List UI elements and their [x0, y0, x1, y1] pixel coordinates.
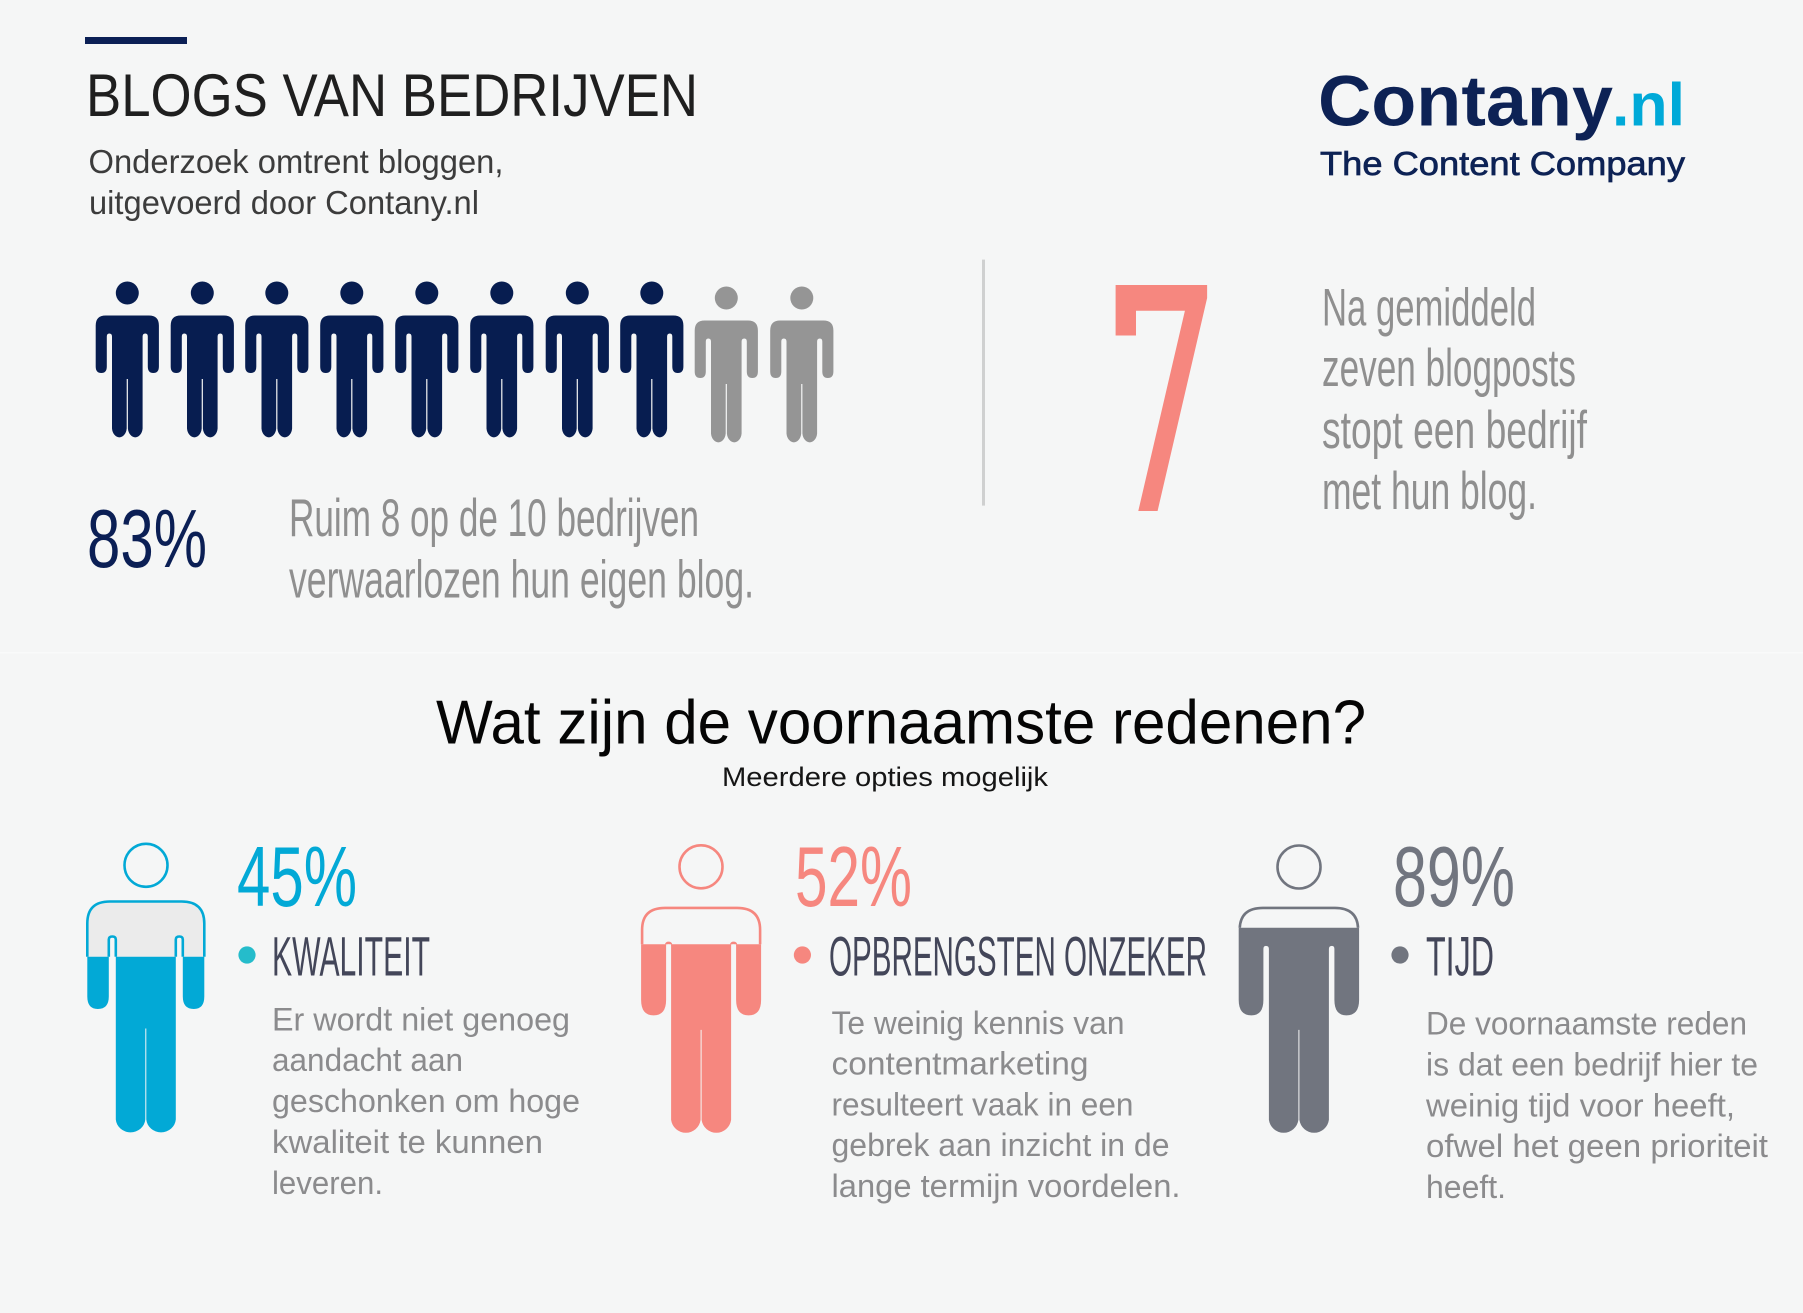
description: Er wordt niet genoeg	[272, 1002, 570, 1038]
description: De voornaamste reden	[1426, 1006, 1747, 1042]
stat description: seven posts	[1322, 278, 1587, 521]
person 8	[620, 282, 683, 437]
description: geschonken om hoge	[272, 1083, 580, 1119]
stat description: verwaarlozen hun eigen blog.	[289, 551, 754, 610]
description: weinig tijd voor heeft,	[1425, 1088, 1735, 1124]
icon: person 52% filled	[641, 845, 761, 1133]
description	[832, 1005, 1180, 1204]
percentage: 89%	[1393, 830, 1515, 925]
stat description: seven posts: met hun blog.	[1322, 462, 1537, 521]
bullet	[794, 946, 811, 964]
subtitle	[88, 143, 504, 221]
bullet	[238, 946, 256, 964]
person 4	[320, 282, 383, 437]
title: BLOGS VAN BEDRIJVEN	[86, 62, 698, 129]
divider	[982, 260, 985, 506]
description	[272, 1002, 580, 1201]
stat description: seven posts: Na gemiddeld	[1322, 278, 1536, 337]
stat description: Ruim 8 op de 10 bedrijven	[289, 489, 699, 548]
panel: opbrengsten onzeker	[641, 830, 1207, 1204]
stat description: seven posts: zeven blogposts	[1322, 339, 1576, 398]
description: resulteert vaak in een	[832, 1086, 1134, 1122]
label: OPBRENGSTEN ONZEKER	[829, 925, 1207, 988]
logo	[1318, 62, 1686, 182]
section heading: Wat zijn de voornaamste redenen?	[436, 688, 1366, 757]
pictogram row: 8 of 10 people	[96, 282, 833, 442]
person 7	[546, 282, 609, 437]
person 6	[470, 282, 533, 437]
label: KWALITEIT	[272, 925, 430, 988]
person 1	[96, 282, 159, 437]
description: gebrek aan inzicht in de	[832, 1127, 1170, 1163]
big number 7: 7	[1104, 224, 1223, 585]
icon: person 45% filled	[87, 844, 204, 1132]
section subheading: Meerdere opties mogelijk	[722, 762, 1049, 792]
percentage: 45%	[237, 830, 357, 925]
logo: .nl	[1612, 72, 1685, 138]
icon: person 89% filled	[1239, 846, 1359, 1133]
stat: 83%: 83%	[87, 492, 207, 585]
description: heeft.	[1426, 1169, 1506, 1205]
panel: tijd	[1239, 830, 1768, 1205]
logo: The Content Company	[1320, 145, 1686, 182]
description: ofwel het geen prioriteit	[1426, 1128, 1768, 1164]
label: TIJD	[1426, 925, 1494, 988]
description: lange termijn voordelen.	[832, 1168, 1180, 1204]
description	[1425, 1006, 1768, 1205]
description: kwaliteit te kunnen	[272, 1124, 543, 1160]
logo: Contany	[1318, 62, 1614, 142]
subtitle: uitgevoerd door Contany.nl	[89, 184, 479, 221]
person 10 grey	[770, 286, 833, 442]
bullet	[1391, 946, 1409, 964]
stat description: seven posts: stopt een bedrijf	[1322, 401, 1587, 460]
person 5	[395, 282, 458, 437]
description: leveren.	[272, 1165, 383, 1201]
description: is dat een bedrijf hier te	[1426, 1046, 1758, 1082]
panel: kwaliteit	[87, 830, 580, 1201]
person 3	[245, 282, 308, 437]
description: Te weinig kennis van	[832, 1005, 1124, 1041]
person 9 grey	[695, 286, 758, 442]
description: contentmarketing	[832, 1046, 1088, 1082]
person 2	[171, 282, 234, 437]
accent bar	[85, 37, 187, 44]
description: aandacht aan	[272, 1042, 463, 1078]
percentage: 52%	[795, 830, 912, 925]
stat description	[289, 489, 754, 610]
subtitle: Onderzoek omtrent bloggen,	[88, 143, 504, 180]
